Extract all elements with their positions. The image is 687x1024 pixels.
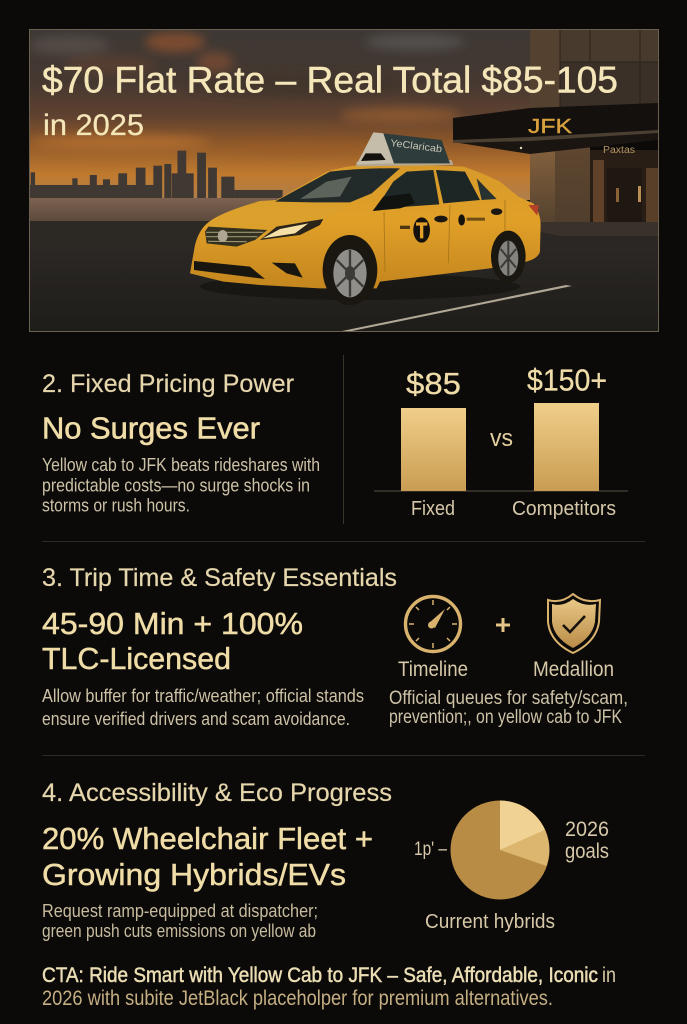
panel: hero photo with taxi <box>30 30 658 332</box>
label: timeline: Timeline <box>398 658 468 681</box>
label: terminal sign: Paxtas <box>603 145 635 156</box>
label: 2026 goals: 2026 <box>565 818 609 841</box>
text block: fixed pricing description: storms or rush hours. <box>42 496 190 516</box>
subheading: 45-90 min: 45-90 Min + 100% <box>42 606 303 641</box>
call to action <box>42 964 616 1010</box>
text block: accessibility description: green push cuts emissions on yellow ab <box>42 921 316 941</box>
icon: shield medallion <box>548 594 600 653</box>
label: vs: vs <box>490 425 513 452</box>
label: JFK sign: JFK <box>528 116 573 138</box>
illustration: yellow taxi <box>190 132 541 305</box>
icon: plus <box>496 618 510 632</box>
bar: fixed <box>401 408 466 491</box>
text block: fixed pricing description: Yellow cab to JFK beats rideshares with <box>42 455 320 475</box>
illustration: water and sea wall <box>30 198 280 250</box>
pie chart: hybrids <box>450 800 550 900</box>
subheading: no surges ever: No Surges Ever <box>42 410 260 446</box>
bar chart: fixed vs competitors <box>374 362 628 520</box>
label: 2026 goals <box>565 818 609 863</box>
text block: fixed pricing description <box>42 455 320 516</box>
illustration: sunset sky <box>30 30 550 200</box>
heading: fixed pricing power: 2. Fixed Pricing Power <box>42 370 294 398</box>
label: competitors: Competitors <box>512 498 616 520</box>
value: $150+: $150+ <box>527 362 607 398</box>
heading: trip time and safety: 3. Trip Time & Safety Essentials <box>42 564 397 592</box>
text block: fixed pricing description: predictable costs—no surge shocks in <box>42 476 310 496</box>
subheading: 45-90 min: TLC-Licensed <box>42 641 231 676</box>
text block: official queues: prevention;, on yellow cab to JFK <box>389 707 622 728</box>
title <box>42 60 618 142</box>
label: fixed: Fixed <box>411 498 455 520</box>
subheading: 45-90 min <box>42 606 303 676</box>
illustration: road <box>30 222 658 331</box>
text block: trip description <box>42 686 364 729</box>
bar: competitors <box>534 403 599 491</box>
text block: accessibility description <box>42 901 318 941</box>
text block: official queues: Official queues for safety/scam, <box>389 688 628 709</box>
subheading: wheelchair fleet <box>42 821 373 892</box>
label: 2026 goals: goals <box>565 840 609 863</box>
label: pie left: 1p' – <box>414 839 447 860</box>
label: current hybrids: Current hybrids <box>425 911 555 933</box>
subheading: wheelchair fleet: 20% Wheelchair Fleet + <box>42 821 373 856</box>
heading: accessibility and eco: 4. Accessibility & Eco Progress <box>42 779 392 807</box>
panel: fixed pricing <box>42 370 320 516</box>
title: in 2025 <box>43 109 144 142</box>
illustration: city skyline <box>30 151 283 198</box>
text block: trip description: Allow buffer for traffic/weather; official stands <box>42 686 364 706</box>
panel: accessibility and eco <box>42 779 609 941</box>
text block: accessibility description: Request ramp-equipped at dispatcher; <box>42 901 318 921</box>
title: $70 Flat Rate – Real Total $85-105 <box>42 60 618 100</box>
call to action: 2026 with subite JetBlack placeholper for premium alternatives. <box>42 987 553 1010</box>
label: medallion: Medallion <box>533 658 614 681</box>
label: roof sign: YeClaricab <box>390 138 443 155</box>
text block: trip description: ensure verified drivers and scam avoidance. <box>42 709 350 729</box>
illustration: JFK terminal building <box>453 30 658 236</box>
panel: trip time and safety <box>42 564 628 729</box>
text block: official queues <box>389 688 628 728</box>
subheading: wheelchair fleet: Growing Hybrids/EVs <box>42 857 346 892</box>
call to action: in <box>602 964 616 987</box>
call to action: CTA: Ride Smart with Yellow Cab to JFK – Safe, Affordable, Iconic <box>42 964 598 987</box>
icon: gauge timer <box>406 596 460 652</box>
value: $85: $85 <box>406 366 461 401</box>
